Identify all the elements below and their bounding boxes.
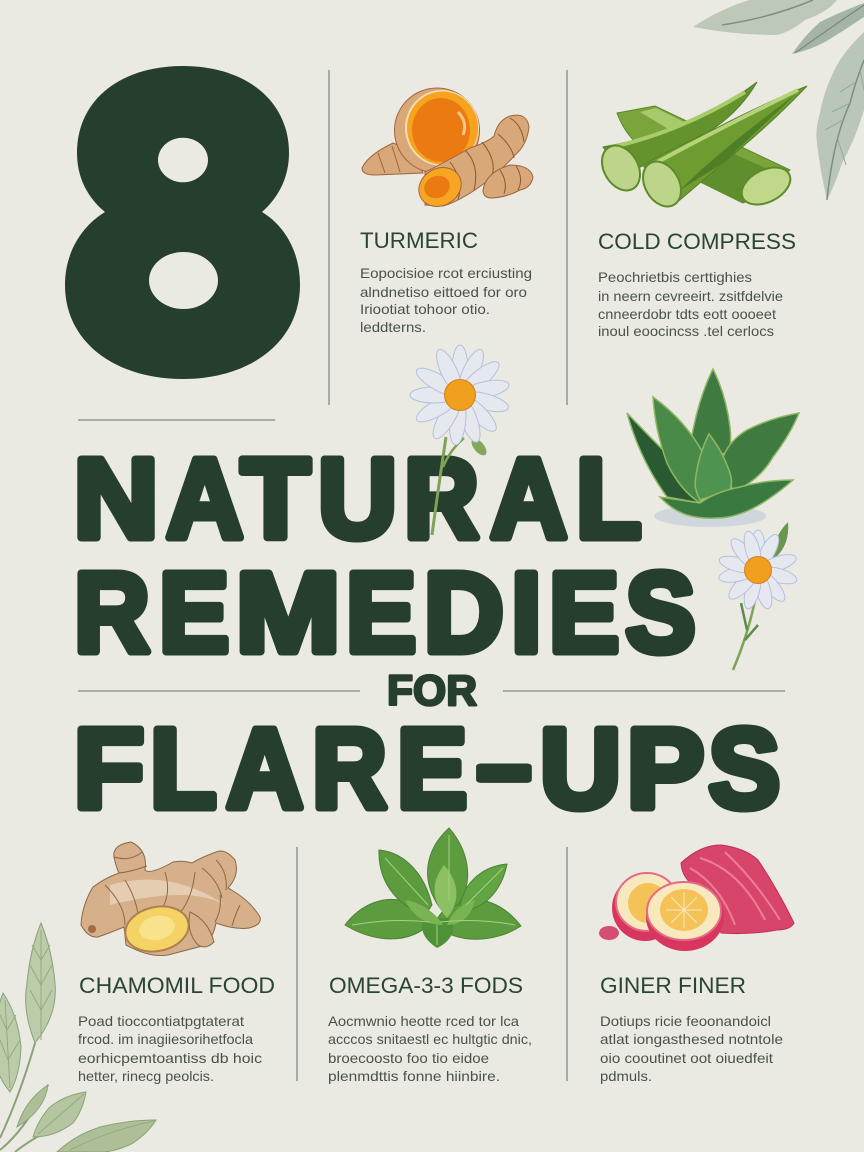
icon: aloe plant (627, 369, 799, 527)
text: turmeric description: Eopocisioe rcot erciusting (360, 265, 532, 281)
title: F (74, 707, 144, 832)
text: cold compress description: cnneerdobr tdts eott oooeet (598, 306, 776, 322)
decorative leaves: bottom left (0, 923, 156, 1152)
title: E (346, 550, 416, 676)
title: L (576, 436, 641, 562)
text: turmeric description: leddterns. (360, 319, 426, 335)
title: R (312, 705, 387, 831)
title: FOR (387, 667, 477, 715)
text: turmeric description (360, 265, 532, 335)
title: A (166, 437, 243, 562)
text: giner finer description: oio cooutinet oot oiuedfeit (600, 1050, 773, 1066)
icon: daisy upper (410, 345, 511, 535)
divider lines (78, 70, 785, 1081)
title (74, 435, 780, 832)
icon: mint leaves (345, 828, 521, 948)
icon: turmeric (362, 88, 533, 214)
title: P (627, 706, 704, 832)
text: omega fods description: acccos snitaestl ec hultgtic dnic, (328, 1031, 532, 1047)
heading: giner finer: GINER FINER (600, 973, 746, 998)
title: E (549, 550, 619, 676)
icon: aloe slices (594, 82, 807, 213)
title: - (474, 701, 534, 827)
title: S (708, 706, 780, 832)
title: E (397, 706, 467, 832)
text: chamomil food description: eorhicpemtoantiss db hoic (78, 1050, 262, 1066)
decorative leaves: top right (693, 0, 864, 200)
text: cold compress description (598, 269, 783, 339)
title: U (318, 435, 397, 562)
title: T (241, 435, 310, 562)
text: turmeric description: alndnetiso eittoed for oro (360, 284, 527, 300)
text: cold compress description: Peochrietbis certtighies (598, 269, 752, 285)
title: M (236, 550, 340, 676)
icon: ginger root (81, 842, 260, 957)
big number 8: 8 (71, 2, 293, 449)
title: R (74, 550, 150, 676)
text: chamomil food description (78, 1013, 262, 1084)
text: giner finer description: atlat iongasthesed notntole (600, 1031, 783, 1047)
heading: cold compress: COLD COMPRESS (598, 229, 796, 254)
text: giner finer description: Dotiups ricie feoonandoicl (600, 1013, 771, 1029)
text: turmeric description: Iriootiat tohoor otio. (360, 301, 490, 317)
text: omega fods description (328, 1013, 532, 1084)
title: A (226, 707, 303, 832)
heading: turmeric: TURMERIC (360, 228, 478, 253)
text: cold compress description: inoul eoocincss .tel cerlocs (598, 323, 774, 339)
text: chamomil food description: frcod. im inagiiesorihetfocla (78, 1031, 253, 1047)
title: L (150, 706, 216, 832)
title: S (626, 550, 696, 676)
title: E (159, 550, 229, 676)
text: omega fods description: Aocmwnio heotte rced tor lca (328, 1013, 519, 1029)
text: giner finer description: pdmuls. (600, 1068, 652, 1084)
title: U (540, 705, 621, 832)
title: N (74, 437, 159, 562)
icon: sweet potato with slices (599, 845, 794, 951)
title: I (511, 549, 542, 676)
text: omega fods description: plenmdttis fonne hiinbire. (328, 1068, 500, 1084)
heading: chamomil food: CHAMOMIL FOOD (79, 973, 275, 998)
heading: omega fods: OMEGA-3-3 FODS (329, 973, 523, 998)
text: chamomil food description: hetter, rinecg peolcis. (78, 1068, 214, 1084)
text: giner finer description (600, 1013, 783, 1084)
title: R (404, 435, 479, 561)
text: omega fods description: broecoosto foo tio eidoe (328, 1050, 489, 1066)
text: cold compress description: in neern cevreeirt. zsitfdelvie (598, 288, 783, 304)
title: D (424, 549, 504, 676)
title: A (490, 437, 567, 562)
icon: daisy lower (717, 522, 798, 670)
text: chamomil food description: Poad tioccontiatpgtaterat (78, 1013, 244, 1029)
